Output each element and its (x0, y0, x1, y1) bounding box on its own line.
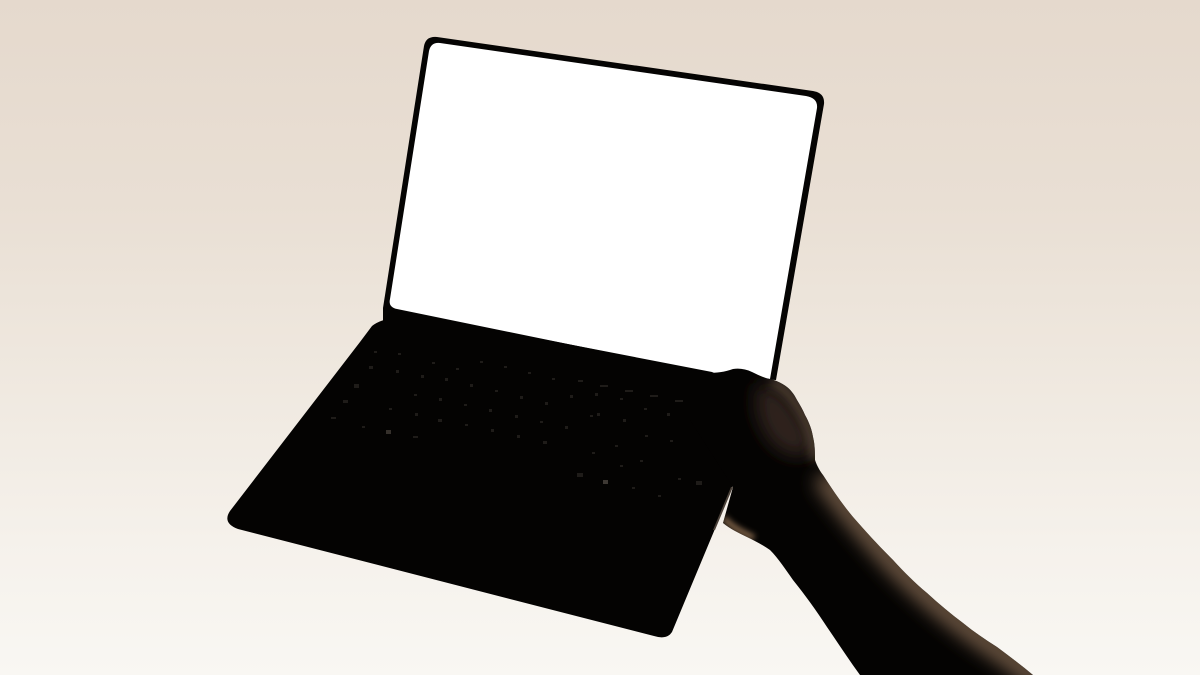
keyboard key legends (331, 351, 721, 497)
knuckle edge highlight (772, 381, 814, 460)
laptop lid frame (383, 37, 824, 380)
forearm upper edge highlight (822, 476, 1040, 675)
arm silhouette (690, 369, 1033, 675)
back of hand shading (756, 382, 813, 456)
laptop right edge sliver in front of wrist (713, 487, 733, 530)
laptop (227, 37, 824, 637)
laptop base keyboard deck (227, 310, 772, 637)
laptop screen (390, 43, 817, 379)
arm rim light (724, 381, 1040, 675)
wrist underside highlight (724, 518, 754, 538)
hand and forearm (690, 369, 1040, 675)
